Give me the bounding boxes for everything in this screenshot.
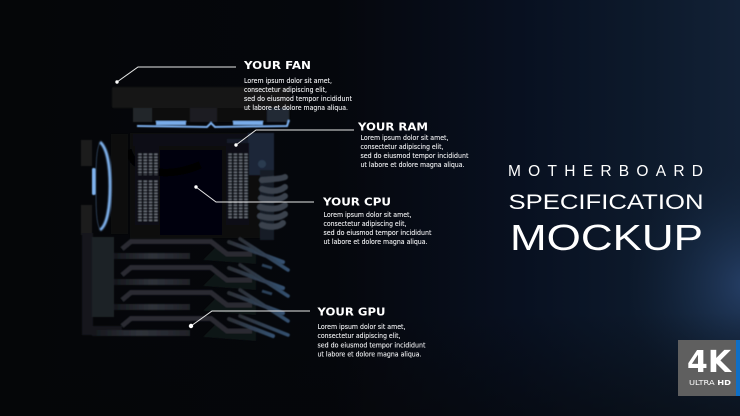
text block: cpu: Lorem ipsum dolor sit amet, [324, 210, 412, 219]
title: MOTHERBOARD [508, 163, 703, 180]
text block: fan: ut labore et dolore magna aliqua. [244, 103, 348, 112]
text block: cpu: consectetur adipiscing elit, [324, 219, 406, 228]
text block: gpu: sed do eiusmod tempor incididunt [318, 340, 426, 350]
text block: gpu: consectetur adipiscing elit, [318, 331, 400, 340]
panel: top fan [112, 87, 290, 127]
text block: fan [244, 76, 352, 112]
panel: RAM slots [135, 143, 249, 225]
leader line: fan [115, 67, 236, 84]
leader line: gpu [189, 311, 310, 328]
badge: 4K ultra HD: 4K [687, 345, 733, 380]
text block: ram: Lorem ipsum dolor sit amet, [360, 133, 448, 142]
GPU card 4 [92, 316, 288, 341]
callout: gpu [189, 306, 426, 358]
heading: your gpu: YOUR GPU [316, 306, 386, 318]
heading: your fan: YOUR FAN [243, 59, 311, 72]
title: SPECIFICATION [508, 191, 704, 214]
GPU card 3 [114, 290, 288, 321]
motherboard illustration [81, 87, 290, 341]
callout: ram [234, 120, 469, 169]
text block: fan: sed do eiusmod tempor incididunt [244, 94, 352, 103]
text block: ram: ut labore et dolore magna aliqua. [360, 160, 464, 169]
text block: gpu: ut labore et dolore magna aliqua. [318, 350, 422, 358]
leader line: ram [234, 130, 354, 147]
text block: ram: consectetur adipiscing elit, [360, 142, 444, 151]
badge: 4K ultra HD [678, 340, 740, 396]
title: MOCKUP [510, 217, 703, 258]
text block: fan: Lorem ipsum dolor sit amet, [244, 76, 332, 85]
GPU card 1 [114, 239, 288, 270]
text block: fan: consectetur adipiscing elit, [244, 85, 327, 94]
GPU card 2 [114, 265, 288, 296]
text block: cpu: ut labore et dolore magna aliqua. [324, 237, 428, 246]
panel: side fan ring [81, 134, 128, 235]
panel: board [128, 133, 274, 240]
heading: your ram: YOUR RAM [357, 120, 428, 134]
text block: gpu: Lorem ipsum dolor sit amet, [318, 322, 406, 331]
heading: your cpu: YOUR CPU [322, 196, 391, 208]
callout: fan [115, 59, 352, 112]
panel: GPU stack [82, 233, 288, 341]
text block: cpu: sed do eiusmod tempor incididunt [324, 228, 432, 237]
leader line: cpu [194, 185, 314, 202]
text block: ram: sed do eiusmod tempor incididunt [360, 151, 469, 160]
text block: cpu [324, 210, 432, 246]
badge: 4K ultra HD: ULTRA HD [689, 379, 731, 387]
title [508, 163, 704, 258]
text block: gpu [318, 322, 426, 358]
callout: cpu [194, 185, 432, 246]
text block: ram [360, 133, 469, 169]
panel: cable bundle [260, 177, 285, 227]
